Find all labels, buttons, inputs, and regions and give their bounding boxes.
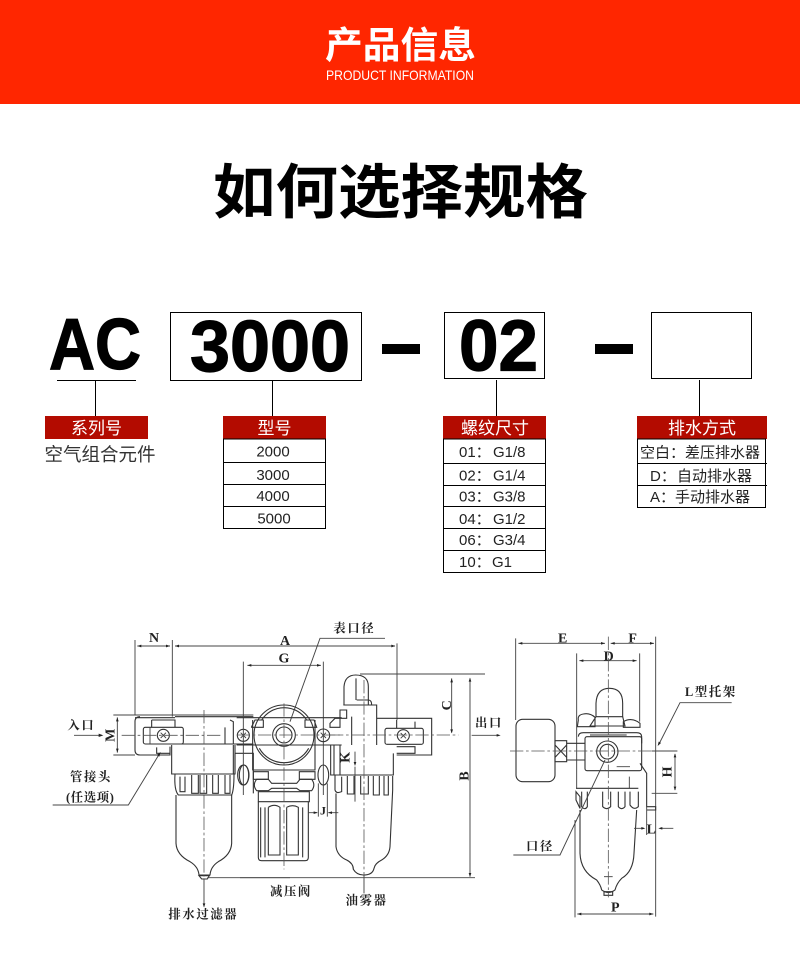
dimension A (175, 634, 397, 720)
banner subtitle: PRODUCT INFORMATION (326, 67, 474, 83)
lubricator label: 油雾器 (346, 893, 388, 908)
drain filter label: 排水过滤器 (168, 907, 238, 922)
side view fins and bowl (576, 788, 638, 895)
column: thread size table: 04： (459, 511, 491, 528)
dimension N: N (149, 631, 159, 646)
dimension E (516, 631, 605, 720)
drain filter label (168, 878, 238, 922)
header banner (0, 0, 800, 104)
dimension M: M (104, 729, 119, 742)
dimension A: A (280, 634, 290, 649)
lubricator label (346, 875, 388, 908)
filter body and bowl (172, 717, 253, 879)
code box: 3000: 3000 (190, 307, 350, 387)
dimension D (577, 649, 640, 788)
column: thread size table (443, 416, 546, 572)
model code selector (44, 305, 767, 572)
front view left: filter unit (53, 631, 290, 922)
code box: 02 (444, 306, 544, 416)
L bracket callout: L型托架 (685, 684, 737, 699)
column: model table (223, 416, 326, 528)
dimension K: K (338, 752, 353, 763)
outlet label and arrow (472, 715, 503, 737)
code: AC: AC (49, 305, 141, 385)
dimension C: C (440, 700, 455, 710)
pipe joint callout (53, 752, 161, 805)
column: thread size table: 01： (459, 444, 491, 461)
column: thread size table: G3/8 (493, 488, 526, 506)
column: thread size table: 02： (459, 468, 491, 484)
connector between filter and regulator (235, 662, 253, 795)
technical drawing: front view (53, 620, 503, 922)
dimension M (104, 715, 253, 755)
center lines side view (510, 637, 677, 897)
inlet label and arrow: 入口 (67, 718, 95, 732)
center lines lubricator (330, 680, 458, 876)
column: model table: 2000 (256, 444, 290, 460)
code box: empty (652, 312, 752, 416)
dimension H: H (660, 766, 675, 777)
column: model table: 5000 (257, 510, 291, 528)
dimension N (135, 631, 172, 717)
column: thread size table: 03： (459, 488, 491, 506)
center lines filter (122, 710, 222, 877)
dimension C (360, 674, 485, 733)
column: drain type table: 排水方式 (668, 419, 736, 438)
column: drain type table: 空白： (640, 444, 685, 462)
column: thread size table: G1 (492, 554, 512, 571)
banner title: 产品信息 (325, 15, 476, 69)
column: model table: 3000 (256, 467, 290, 484)
inlet label and arrow (67, 718, 103, 737)
column: drain type table: A： (650, 489, 675, 506)
dimension K (338, 752, 356, 802)
regulator head (237, 705, 342, 785)
inlet fitting (135, 717, 183, 755)
dimension J (308, 783, 338, 818)
dimension L: L (647, 822, 656, 837)
L bracket (640, 763, 656, 810)
main heading: 如何选择规格 (213, 145, 588, 230)
column: drain type table (637, 416, 767, 508)
pipe joint callout: (任选项) (66, 790, 115, 805)
L bracket callout (658, 684, 737, 746)
column: thread size table: 螺纹尺寸 (461, 419, 529, 438)
gauge (516, 719, 585, 782)
dimension H (652, 751, 677, 793)
outlet label and arrow: 出口 (475, 715, 503, 730)
column: thread size table: G1/4 (493, 468, 526, 484)
dimension J: J (320, 804, 326, 818)
column: model table: 4000 (256, 488, 290, 505)
dimension F: F (628, 631, 637, 646)
column: drain type table: 手动排水器 (675, 489, 750, 506)
port size callout: 口径 (526, 838, 554, 853)
column: drain type table: 差压排水器 (685, 444, 760, 462)
dimension B: B (458, 771, 473, 781)
column: drain type table: 自动排水器 (677, 468, 752, 485)
side view head (577, 688, 642, 788)
series description: 空气组合元件 (44, 444, 156, 465)
column: thread size table: 06： (459, 532, 491, 549)
dimension E: E (558, 631, 567, 646)
dash one (382, 344, 420, 354)
dimension G (247, 652, 323, 795)
code: AC (49, 305, 141, 416)
drain baseline (207, 876, 290, 879)
column: model table: 型号 (258, 419, 292, 438)
dimension P (575, 820, 653, 917)
dimension L (634, 807, 673, 837)
center lines regulator (237, 703, 340, 869)
front view right: regulator and lubricator (175, 620, 503, 908)
technical drawing: side view (510, 631, 737, 917)
column: thread size table: G1/8 (493, 444, 526, 461)
pipe joint callout: 管接头 (70, 769, 112, 784)
column: thread size table: G3/4 (493, 532, 526, 549)
gauge port callout: 表口径 (333, 620, 375, 635)
column: thread size table: 10： (459, 554, 491, 571)
dimension B (240, 678, 475, 878)
column: thread size table: G1/2 (493, 511, 526, 528)
column: drain type table: D： (650, 468, 676, 485)
gauge port callout (290, 620, 385, 722)
port size callout (513, 760, 605, 855)
regulator label: 减压阀 (270, 883, 312, 898)
dash two (595, 344, 633, 354)
code box: 3000 (170, 307, 362, 416)
dimension D: D (604, 649, 614, 664)
dimension F (611, 631, 656, 917)
column: series (44, 416, 156, 465)
regulator nut and spring (253, 772, 315, 861)
code box: 02: 02 (459, 306, 538, 386)
dimension P: P (611, 901, 620, 916)
column: series: 系列号 (71, 419, 122, 438)
lubricator (330, 675, 432, 875)
dimension G: G (279, 652, 290, 667)
